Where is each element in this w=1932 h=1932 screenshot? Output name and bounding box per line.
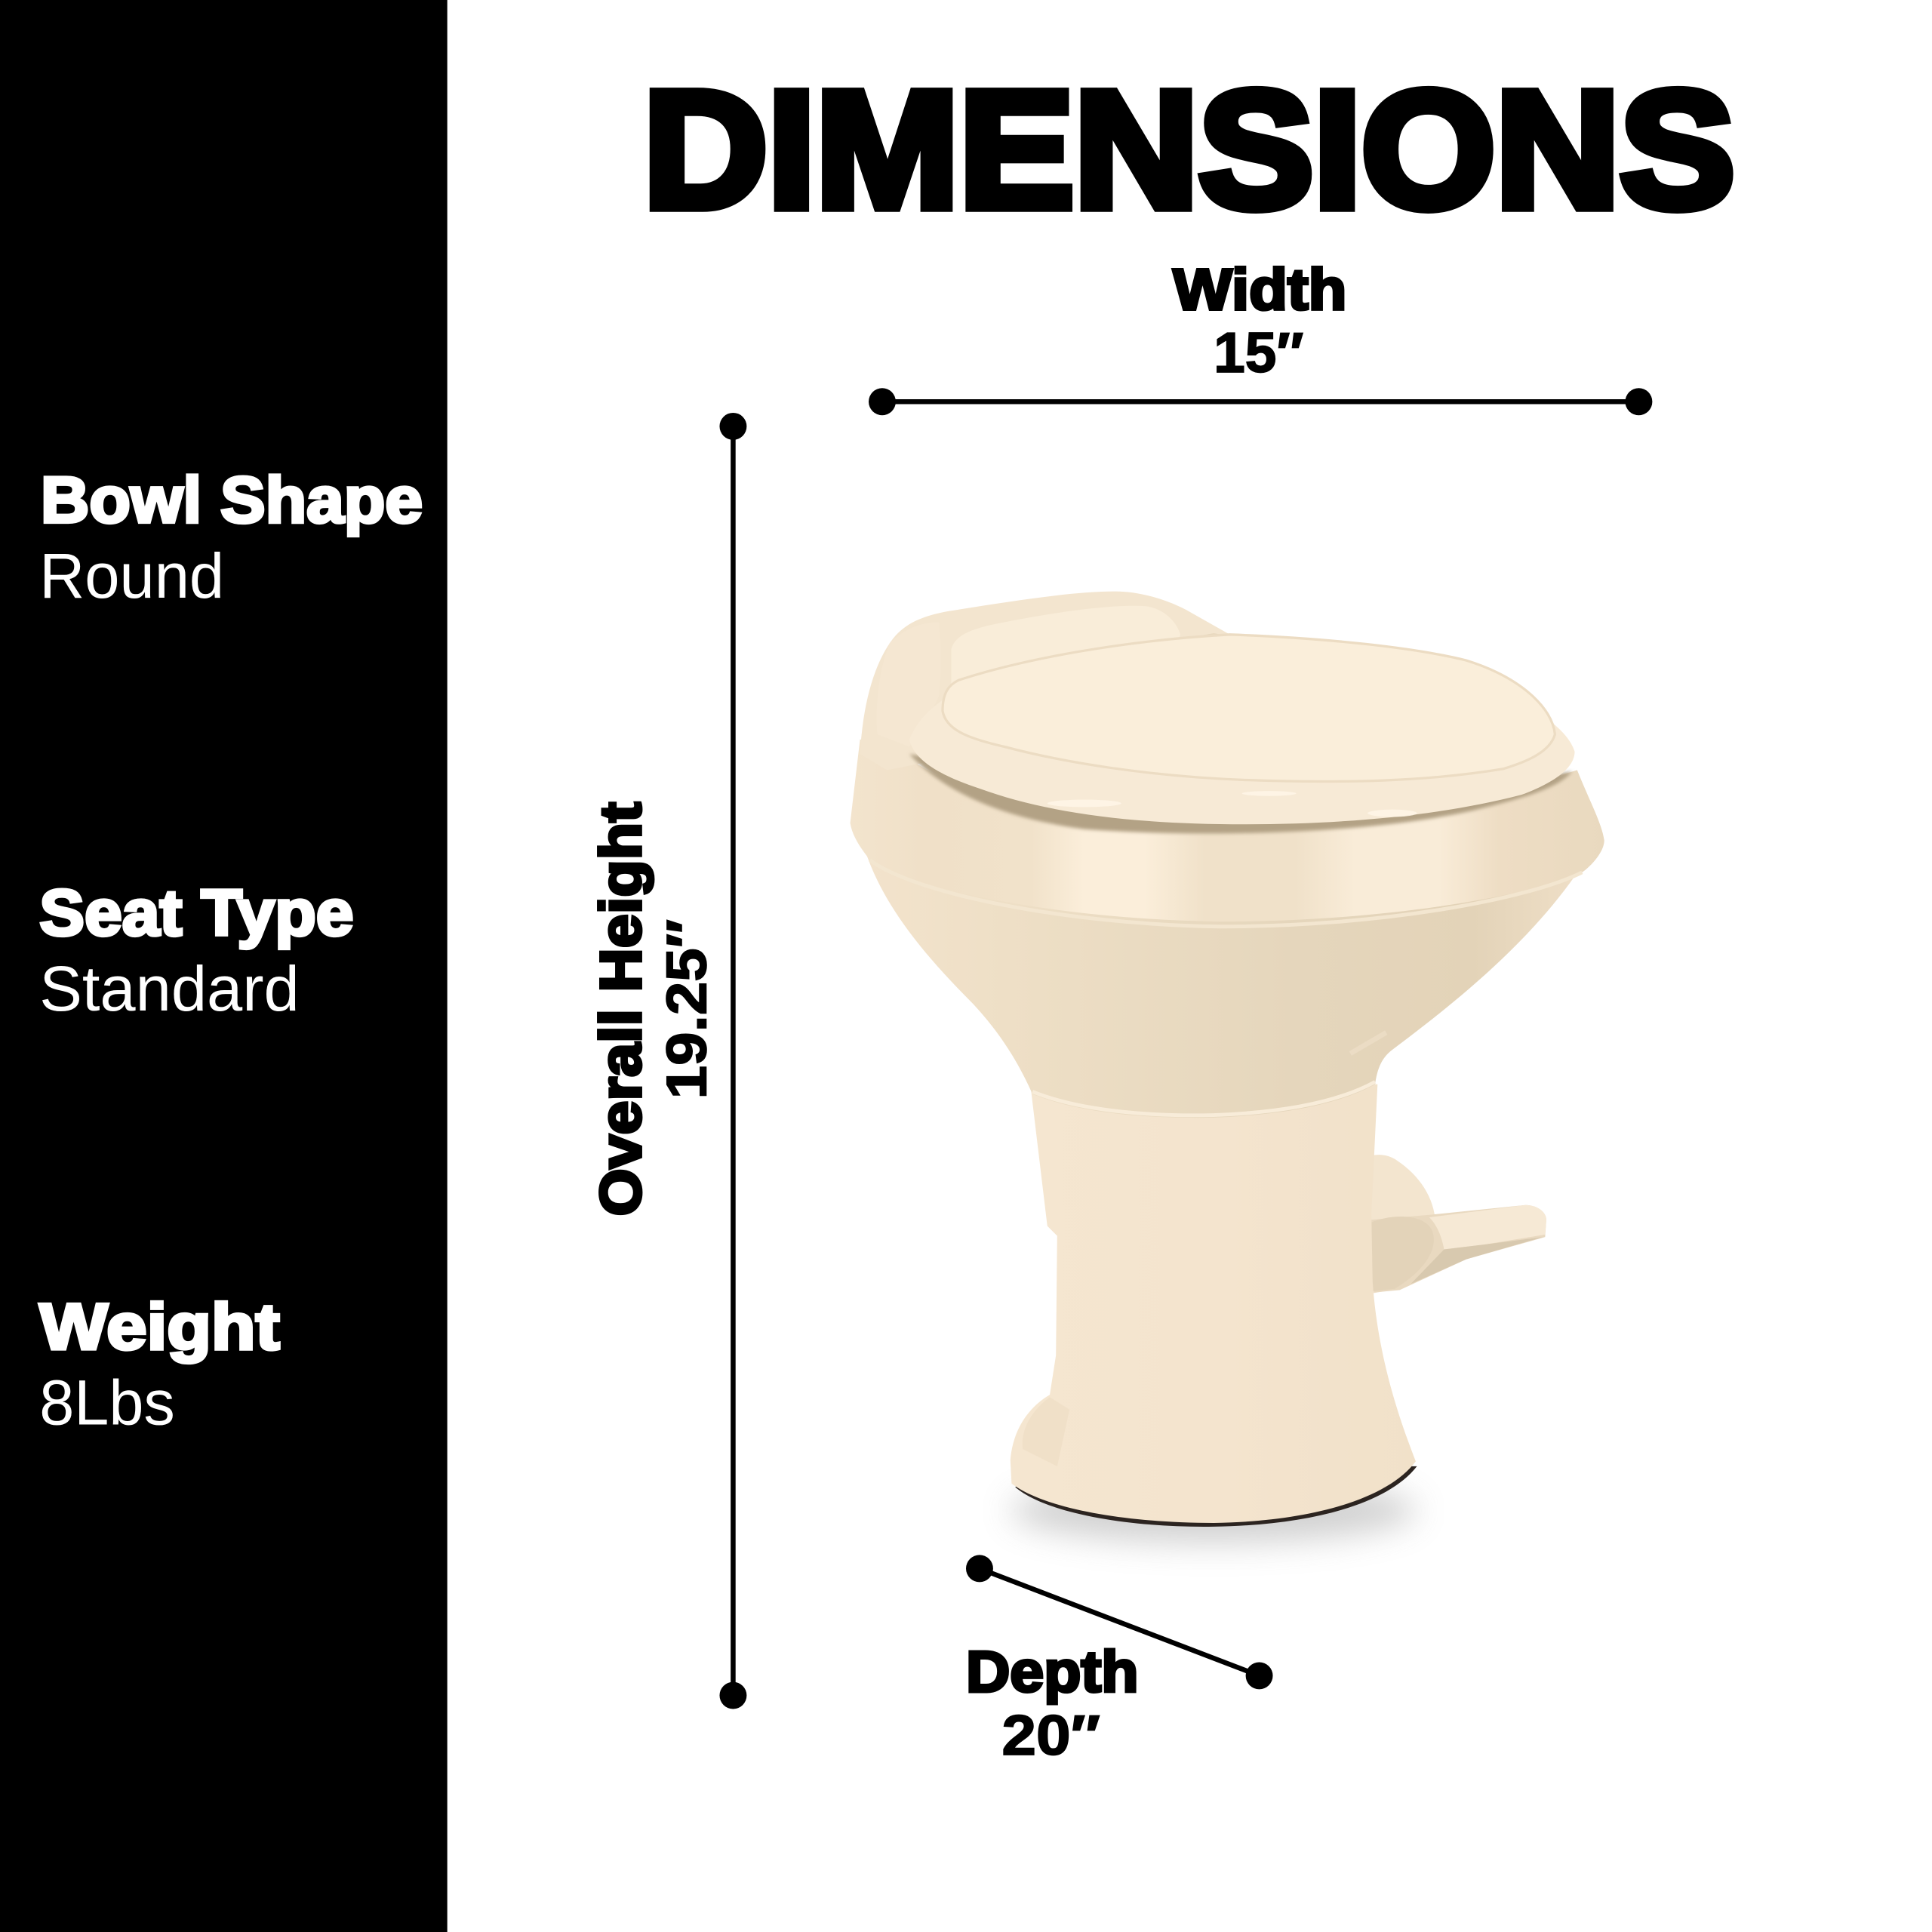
tank back bbox=[860, 592, 1244, 770]
spec: bowl shape bbox=[39, 464, 423, 611]
height label: Overall Height bbox=[589, 802, 654, 1216]
height label bbox=[589, 802, 718, 1216]
spec: seat type bbox=[39, 877, 354, 1024]
spec: weight: Weight bbox=[39, 1291, 280, 1364]
width label bbox=[1173, 258, 1346, 384]
depth dimension line bbox=[966, 1555, 1273, 1689]
tank shaded step bbox=[955, 633, 1229, 690]
seat ring bbox=[909, 684, 1575, 824]
width label: 15″ bbox=[1214, 321, 1303, 384]
base underside bbox=[1015, 1466, 1417, 1527]
spec: seat type: Seat Type bbox=[39, 877, 354, 949]
height label: 19.25″ bbox=[655, 919, 718, 1099]
title: DIMENSIONS bbox=[643, 56, 1735, 242]
left black panel bbox=[0, 0, 448, 1932]
tank left cheek bbox=[877, 622, 941, 746]
rim lower ridge bbox=[870, 860, 1582, 927]
spec: seat type: Standard bbox=[39, 952, 300, 1024]
height dimension line bbox=[719, 413, 746, 1709]
base foot detail bbox=[1023, 1397, 1069, 1466]
depth label: 20″ bbox=[1001, 1703, 1100, 1767]
width dimension line bbox=[869, 388, 1652, 415]
width label: Width bbox=[1173, 258, 1346, 322]
collar line bbox=[1032, 1081, 1375, 1115]
seat highlights bbox=[1048, 791, 1417, 817]
flush pedal bbox=[1371, 1205, 1546, 1293]
depth label bbox=[966, 1641, 1139, 1767]
pedal hub bbox=[1367, 1155, 1437, 1294]
seat lid bbox=[943, 635, 1555, 782]
depth label: Depth bbox=[966, 1641, 1139, 1705]
spec: bowl shape: Bowl Shape bbox=[41, 464, 423, 537]
rim band bbox=[851, 740, 1604, 921]
pedestal bbox=[1011, 1072, 1416, 1523]
tank recess bbox=[951, 606, 1180, 685]
toilet product image bbox=[851, 592, 1604, 1543]
floor shadow bbox=[1011, 1478, 1417, 1543]
bowl seam bbox=[1350, 1032, 1386, 1054]
seat gap shadow bbox=[909, 754, 1572, 833]
spec: weight bbox=[39, 1291, 280, 1438]
spec: weight: 8Lbs bbox=[39, 1366, 175, 1438]
spec: bowl shape: Round bbox=[39, 540, 224, 611]
bowl underside bbox=[865, 851, 1581, 1118]
